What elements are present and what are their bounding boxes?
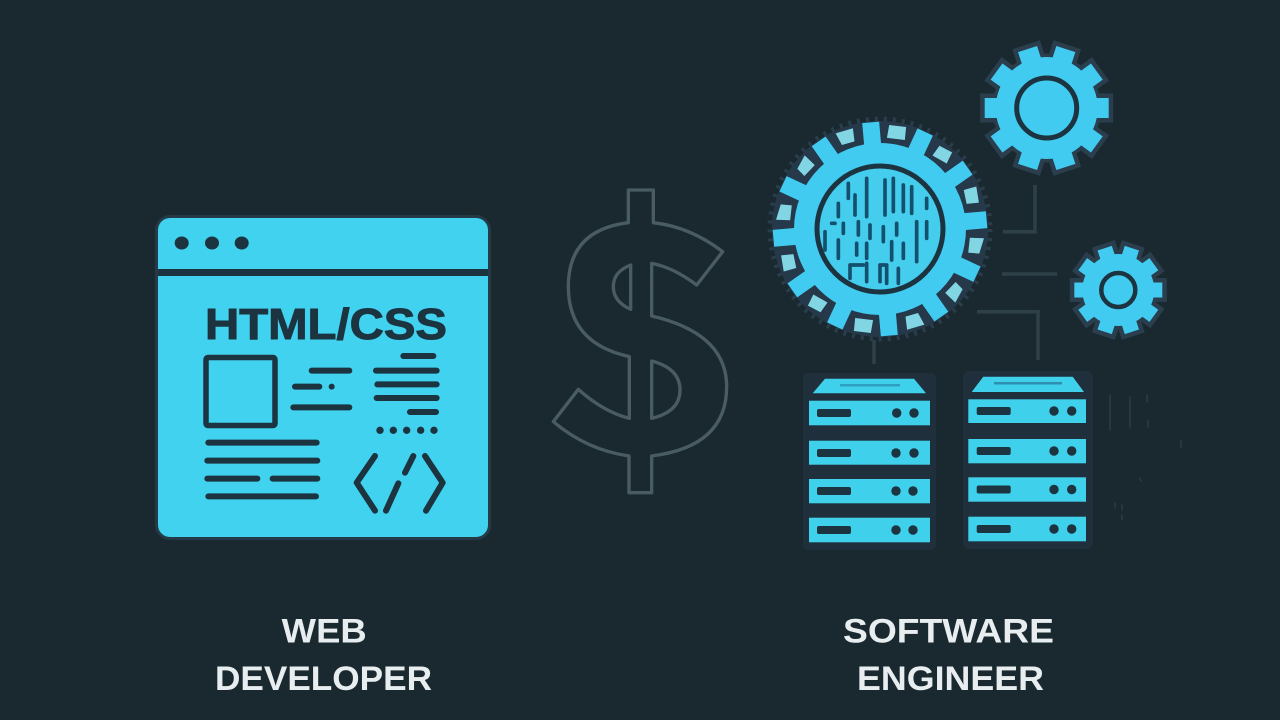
- icon: right text lines and dots: [376, 356, 438, 434]
- server unit 1: [968, 399, 1086, 423]
- panel: web developer browser window icon: [158, 218, 488, 537]
- icon: window control dots: [175, 236, 249, 250]
- icon: paragraph lines: [207, 443, 317, 496]
- label: software engineer: ENGINEER: [857, 660, 1044, 698]
- label: web developer: WEB: [282, 612, 367, 650]
- heading: HTML/CSS: HTML/CSS: [205, 300, 447, 349]
- label: software engineer: SOFTWARE: [843, 612, 1054, 650]
- icon: small gear: [1074, 246, 1162, 334]
- label: web developer: [215, 612, 432, 698]
- gear teeth and body: [773, 122, 987, 336]
- icon: image placeholder square: [206, 358, 275, 426]
- server unit 2: [968, 439, 1086, 463]
- binary code marks: [825, 178, 927, 283]
- icon: left server stack: [803, 373, 936, 550]
- icon: top gear: [985, 46, 1109, 170]
- label: web developer: DEVELOPER: [215, 660, 432, 698]
- gear gap details: [776, 124, 984, 334]
- icon: right server stack: [963, 371, 1093, 549]
- faint data specks: [1110, 395, 1181, 520]
- server unit 2: [809, 441, 930, 465]
- connector lines between gears and servers: [874, 185, 1057, 364]
- icon: text lines beside image: [293, 371, 349, 407]
- server unit 4: [968, 517, 1086, 541]
- server unit 3: [809, 479, 930, 503]
- label: software engineer: [843, 612, 1054, 698]
- server unit 1: [809, 401, 930, 425]
- icon: large gear with binary core: [770, 119, 990, 339]
- icon: dollar sign outline: [553, 190, 727, 493]
- server unit 4: [809, 518, 930, 542]
- server unit 3: [968, 477, 1086, 502]
- icon: code brackets: [357, 456, 443, 511]
